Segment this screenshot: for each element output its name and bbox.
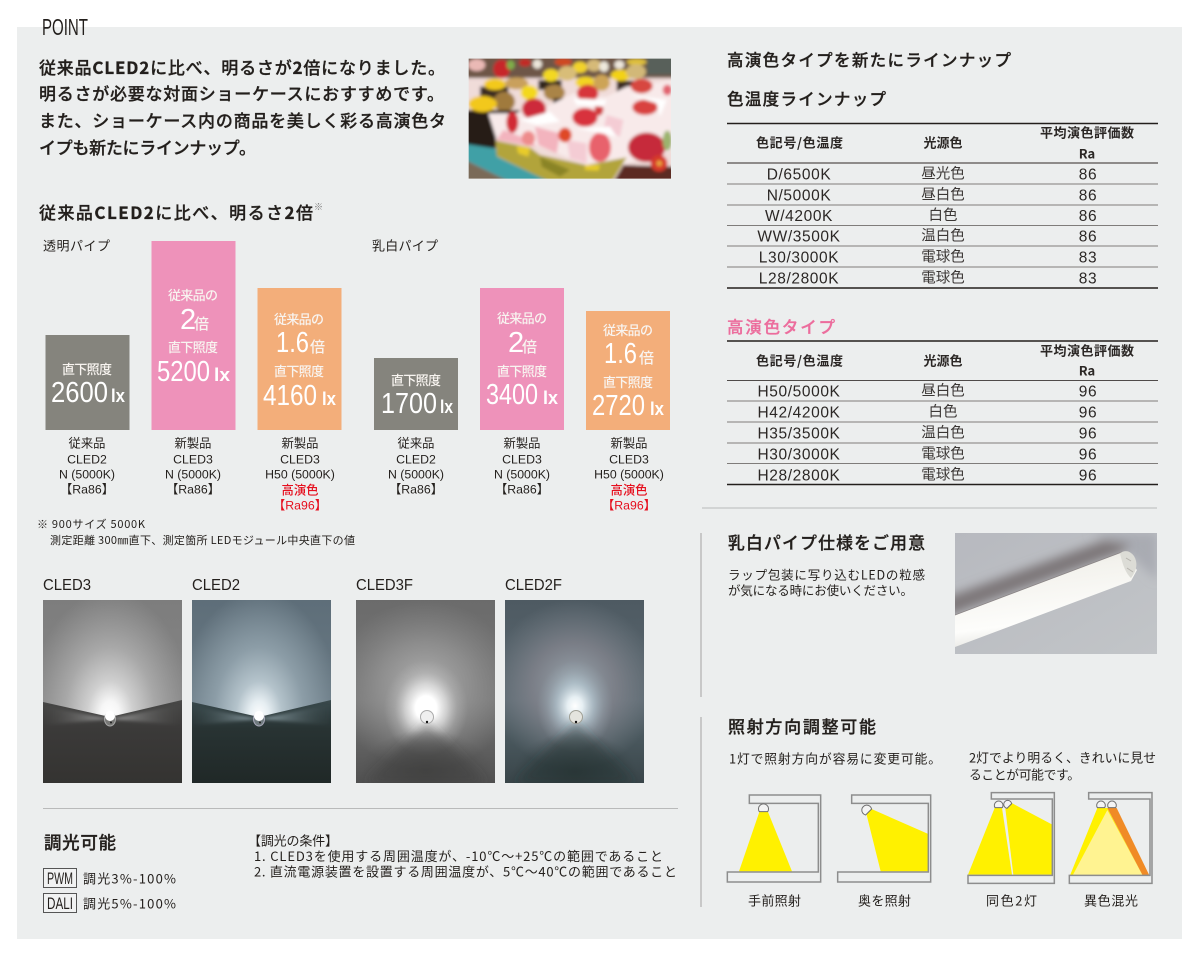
heading: brightness comparison: ※ bbox=[314, 200, 323, 213]
heading: colour temperature lineup: 色温度ラインナップ bbox=[727, 86, 886, 110]
footnote: measurement conditions bbox=[37, 516, 355, 548]
footnote: measurement conditions: ※ 900サイズ 5000K bbox=[37, 516, 146, 532]
bar: CLED3 clear 5200lx: 直下照度 bbox=[168, 337, 218, 356]
caption: CLED3 H50 clear: 新製品 bbox=[282, 436, 318, 450]
heading: adjustable direction: 照射方向調整可能 bbox=[728, 713, 876, 738]
caption: CLED3 clear: N (5000K) bbox=[165, 468, 221, 482]
table: high CRI type: 電球色 bbox=[921, 442, 965, 464]
caption: CLED2 clear: 【Ra86】 bbox=[60, 482, 114, 496]
caption: CLED3 H50 clear bbox=[265, 436, 335, 512]
bar: CLED3 H50 clear 4160lx: 4160 bbox=[263, 380, 317, 412]
caption: CLED2 milky: CLED2 bbox=[396, 452, 436, 466]
bar: CLED2 milky 1700lx bbox=[374, 358, 458, 430]
table: high CRI type: 光源色 bbox=[924, 350, 962, 370]
table: high CRI type: 96 bbox=[1079, 468, 1097, 484]
bar: CLED3 H50 milky 2720lx: 直下照度 bbox=[603, 372, 653, 391]
bar: CLED2 milky 1700lx: lx bbox=[440, 397, 453, 417]
caption: CLED3 H50 clear: CLED3 bbox=[280, 452, 320, 466]
caption: CLED3 milky: CLED3 bbox=[502, 452, 542, 466]
label: CLED2: CLED2 bbox=[192, 577, 240, 594]
bar: CLED3 H50 milky 2720lx: 倍 bbox=[639, 347, 654, 368]
table: high CRI type: 白色 bbox=[928, 400, 958, 422]
table: high CRI type: H35/3500K bbox=[758, 426, 841, 442]
bar: CLED3 H50 milky 2720lx bbox=[586, 311, 670, 430]
text: DALI range: 調光5%-100% bbox=[83, 894, 176, 912]
bar: CLED3 milky 3400lx: 従来品の bbox=[497, 308, 547, 327]
table: colour temperature lineup: 平均演色評価数 bbox=[1040, 122, 1134, 142]
badge: DALI: DALI bbox=[47, 894, 73, 913]
label: CLED2F: CLED2F bbox=[505, 577, 562, 594]
table: colour temperature lineup: 電球色 bbox=[921, 246, 965, 266]
text block: dimming conditions: 【調光の条件】 bbox=[248, 830, 338, 850]
diagram: rear lighting bbox=[838, 795, 931, 882]
photo: CLED3 light spread bbox=[43, 600, 182, 783]
bar: CLED3 H50 clear 4160lx: 1.6 bbox=[276, 327, 309, 359]
table: colour temperature lineup: 電球色 bbox=[921, 266, 965, 288]
bar: CLED2 clear 2600lx: lx bbox=[111, 386, 125, 406]
caption: CLED2 milky: N (5000K) bbox=[388, 468, 444, 482]
table: colour temperature lineup: 昼光色 bbox=[921, 162, 965, 184]
bar: CLED3 H50 clear 4160lx: 倍 bbox=[310, 336, 325, 357]
bar: CLED2 clear 2600lx: 直下照度 bbox=[62, 359, 112, 378]
heading: milky pipe option: 乳白パイプ仕様をご用意 bbox=[728, 530, 925, 554]
photo: cakes in showcase bbox=[465, 55, 674, 182]
table: high CRI type bbox=[727, 340, 1158, 484]
table: high CRI type: 色記号/色温度 bbox=[756, 350, 843, 370]
bar: CLED3 milky 3400lx bbox=[480, 288, 564, 430]
caption: CLED3 H50 milky bbox=[594, 436, 664, 512]
table: high CRI type: 温白色 bbox=[921, 422, 965, 442]
table: colour temperature lineup: 温白色 bbox=[921, 224, 965, 246]
caption: CLED3 milky: 新製品 bbox=[504, 436, 540, 450]
bar: CLED3 H50 milky 2720lx: 2720 bbox=[592, 390, 645, 422]
badge: PWM: PWM bbox=[47, 869, 73, 888]
caption: CLED2 milky bbox=[388, 436, 444, 496]
bar: CLED3 H50 clear 4160lx: 直下照度 bbox=[274, 361, 324, 380]
text block: dimming conditions: 2. 直流電源装置を設置する周囲温度が、5℃～40℃の範囲であること bbox=[254, 862, 677, 880]
photo: CLED3F light spread bbox=[356, 600, 495, 783]
table: high CRI type: 昼白色 bbox=[921, 380, 965, 400]
text block: intro bbox=[39, 54, 446, 159]
table: colour temperature lineup: 光源色 bbox=[924, 132, 962, 152]
caption: CLED3 clear: 新製品 bbox=[175, 436, 211, 450]
bar: CLED3 milky 3400lx: 倍 bbox=[522, 336, 537, 357]
table: colour temperature lineup bbox=[727, 122, 1158, 288]
table: high CRI type: Ra bbox=[1079, 360, 1095, 380]
table: colour temperature lineup: N/5000K bbox=[767, 188, 831, 204]
bar: CLED3 H50 clear 4160lx: 従来品の bbox=[274, 309, 324, 328]
table: high CRI type: H50/5000K bbox=[758, 384, 841, 400]
label: same colour two lamps: 同色2灯 bbox=[986, 890, 1037, 910]
table: colour temperature lineup: 86 bbox=[1079, 166, 1097, 184]
caption: CLED3 H50 clear: 【Ra96】 bbox=[273, 498, 327, 512]
table: high CRI type: H42/4200K bbox=[758, 404, 841, 422]
text: two lamp description: ることが可能です。 bbox=[969, 764, 1080, 784]
caption: CLED2 clear bbox=[59, 436, 115, 496]
table: high CRI type: 96 bbox=[1079, 384, 1097, 400]
photo: milky pipe fixture bbox=[945, 533, 1157, 654]
diagram: front lighting bbox=[727, 795, 821, 882]
badge: DALI bbox=[44, 894, 76, 913]
bar: CLED3 clear 5200lx: 従来品の bbox=[168, 285, 218, 304]
text block: milky pipe description bbox=[728, 564, 925, 599]
caption: CLED2 milky: 従来品 bbox=[398, 436, 434, 450]
bar: CLED2 milky 1700lx: 直下照度 bbox=[391, 370, 441, 389]
text block: intro: 明るさが必要な対面ショーケースにおすすめです。 bbox=[39, 80, 444, 105]
bar: CLED2 milky 1700lx: 1700 bbox=[381, 388, 437, 420]
table: high CRI type: 96 bbox=[1079, 404, 1097, 422]
bar: CLED3 H50 clear 4160lx: lx bbox=[322, 389, 336, 409]
caption: CLED2 clear: CLED2 bbox=[67, 452, 107, 466]
text: PWM range: 調光3%-100% bbox=[83, 868, 176, 888]
table: high CRI type: 96 bbox=[1079, 446, 1097, 464]
heading: high CRI lineup: 高演色タイプを新たにラインナップ bbox=[727, 47, 1012, 71]
caption: CLED3 H50 milky: H50 (5000K) bbox=[594, 468, 664, 482]
text: two lamp description: 2灯でより明るく、きれいに見せ bbox=[969, 748, 1156, 766]
caption: CLED3 H50 clear: 高演色 bbox=[282, 482, 318, 498]
text block: milky pipe description: が気になる時にお使いください。 bbox=[728, 580, 913, 599]
photo: CLED2 light spread bbox=[192, 600, 331, 783]
bar: CLED3 milky 3400lx: 3400 bbox=[486, 379, 538, 411]
caption: CLED2 milky: 【Ra86】 bbox=[389, 482, 443, 496]
bar: CLED3 clear 5200lx: lx bbox=[214, 365, 230, 385]
caption: CLED2 clear: 従来品 bbox=[69, 436, 105, 450]
label: CLED3: CLED3 bbox=[43, 577, 91, 594]
caption: CLED3 clear: CLED3 bbox=[173, 452, 213, 466]
caption: CLED3 H50 milky: 新製品 bbox=[611, 436, 647, 450]
label: rear lighting: 奥を照射 bbox=[858, 890, 911, 910]
bar: CLED3 clear 5200lx bbox=[152, 241, 236, 430]
text block: intro: イプも新たにラインナップ。 bbox=[39, 134, 256, 159]
label: front lighting: 手前照射 bbox=[748, 890, 801, 910]
text: two lamp description bbox=[969, 748, 1156, 784]
heading: high CRI type: 高演色タイプ bbox=[727, 314, 836, 338]
text: single lamp description: 1灯で照射方向が容易に変更可能。 bbox=[729, 748, 941, 768]
caption: CLED3 H50 milky: CLED3 bbox=[609, 452, 649, 466]
bar: CLED2 clear 2600lx bbox=[46, 335, 130, 430]
caption: CLED3 milky: N (5000K) bbox=[494, 468, 550, 482]
text block: dimming conditions: 1. CLED3を使用する周囲温度が、-10℃～+25℃の範囲であること bbox=[254, 846, 663, 865]
bar: CLED3 clear 5200lx: 2 bbox=[180, 304, 196, 336]
label: CLED3F: CLED3F bbox=[356, 577, 413, 594]
badge: PWM bbox=[44, 868, 76, 888]
table: high CRI type: H30/3000K bbox=[758, 446, 841, 464]
heading: dimming: 調光可能 bbox=[44, 830, 116, 855]
table: colour temperature lineup: D/6500K bbox=[767, 166, 831, 184]
photo: CLED2F light spread bbox=[505, 600, 644, 783]
table: colour temperature lineup: 白色 bbox=[928, 204, 958, 225]
label: milky pipe: 乳白パイプ bbox=[372, 236, 438, 254]
bar: CLED2 clear 2600lx: 2600 bbox=[51, 377, 108, 409]
bar: CLED3 milky 3400lx: 直下照度 bbox=[497, 361, 547, 380]
label: mixed colour two lamps: 異色混光 bbox=[1084, 890, 1138, 910]
table: colour temperature lineup: W/4200K bbox=[765, 208, 833, 225]
table: colour temperature lineup: 86 bbox=[1079, 228, 1097, 246]
table: colour temperature lineup: WW/3500K bbox=[757, 228, 841, 246]
table: high CRI type: 96 bbox=[1079, 426, 1097, 442]
text block: intro: また、ショーケース内の商品を美しく彩る高演色タ bbox=[39, 107, 446, 132]
bar: CLED3 H50 milky 2720lx: 1.6 bbox=[604, 338, 637, 370]
bar: CLED3 H50 milky 2720lx: 従来品の bbox=[603, 320, 653, 339]
bar: CLED3 H50 milky 2720lx: lx bbox=[650, 399, 664, 419]
bar: CLED3 milky 3400lx: 2 bbox=[508, 327, 524, 359]
table: colour temperature lineup: L28/2800K bbox=[759, 270, 839, 288]
bar: CLED3 milky 3400lx: lx bbox=[543, 388, 558, 408]
bar: CLED3 H50 clear 4160lx bbox=[258, 288, 342, 430]
table: colour temperature lineup: 86 bbox=[1079, 208, 1097, 225]
table: colour temperature lineup: 86 bbox=[1079, 188, 1097, 204]
table: colour temperature lineup: Ra bbox=[1079, 144, 1095, 162]
table: colour temperature lineup: 83 bbox=[1079, 250, 1097, 266]
text block: intro: 従来品CLED2に比べ、明るさが2倍になりました。 bbox=[39, 54, 445, 79]
table: high CRI type: H28/2800K bbox=[758, 468, 841, 484]
caption: CLED3 clear: 【Ra86】 bbox=[166, 482, 220, 496]
table: high CRI type: 平均演色評価数 bbox=[1040, 340, 1134, 360]
table: colour temperature lineup: 昼白色 bbox=[921, 184, 965, 204]
caption: CLED3 H50 milky: 高演色 bbox=[611, 482, 647, 498]
table: colour temperature lineup: 83 bbox=[1079, 270, 1097, 288]
label: clear pipe: 透明パイプ bbox=[43, 236, 110, 254]
caption: CLED3 H50 milky: 【Ra96】 bbox=[602, 498, 656, 512]
text block: milky pipe description: ラップ包装に写り込むLEDの粒感 bbox=[728, 564, 925, 584]
caption: CLED3 clear bbox=[165, 436, 221, 496]
table: colour temperature lineup: 色記号/色温度 bbox=[756, 132, 843, 152]
caption: CLED3 H50 clear: H50 (5000K) bbox=[265, 468, 335, 482]
diagram: same colour two lamps bbox=[968, 793, 1054, 883]
caption: CLED3 milky: 【Ra86】 bbox=[495, 482, 549, 496]
bar: CLED3 clear 5200lx: 5200 bbox=[157, 356, 210, 388]
caption: CLED3 milky bbox=[494, 436, 550, 496]
table: high CRI type: 電球色 bbox=[921, 464, 965, 484]
bar: CLED3 clear 5200lx: 倍 bbox=[194, 313, 209, 334]
text block: dimming conditions bbox=[248, 830, 677, 880]
heading: brightness comparison: 従来品CLED2に比べ、明るさ2倍 bbox=[39, 199, 313, 224]
footnote: measurement conditions: 測定距離 300㎜直下、測定箇所 LEDモジュール中央直下の値 bbox=[50, 532, 355, 548]
heading: POINT: POINT bbox=[42, 14, 88, 40]
diagram: mixed colour two lamps bbox=[1069, 793, 1152, 883]
caption: CLED2 clear: N (5000K) bbox=[59, 468, 115, 482]
table: colour temperature lineup: L30/3000K bbox=[759, 250, 839, 266]
